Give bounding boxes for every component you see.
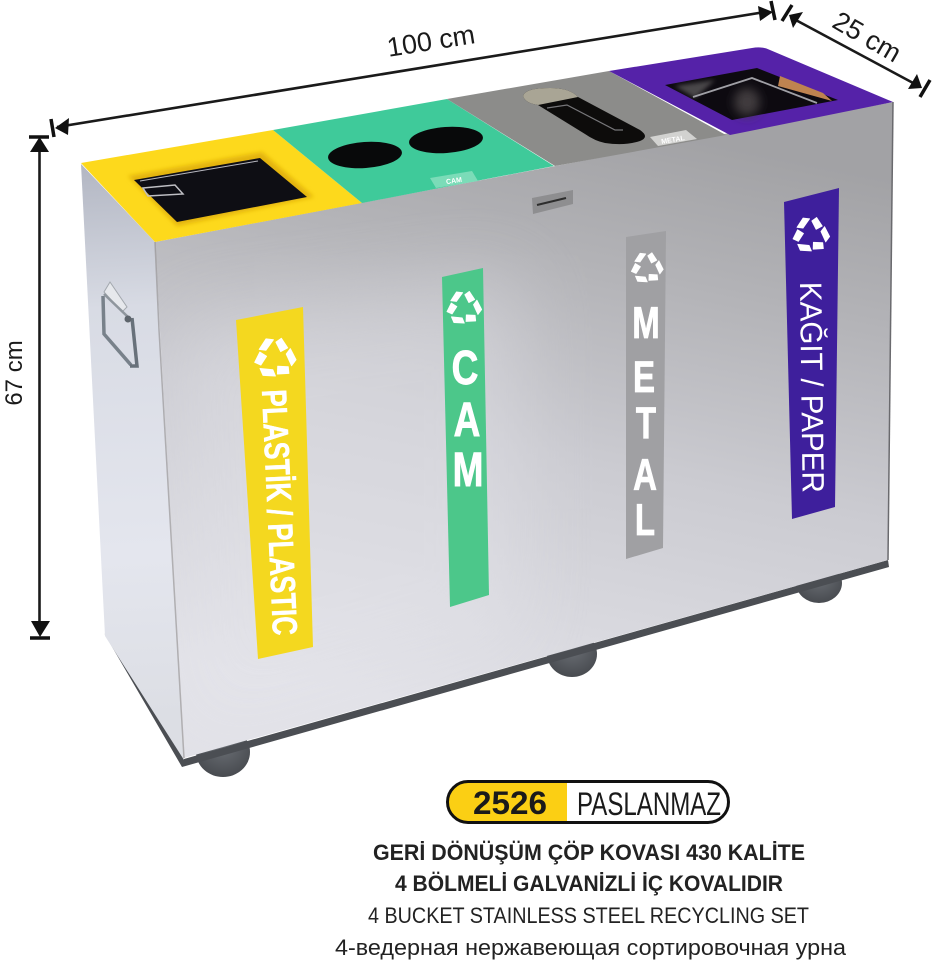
description: Russian line: 4-ведерная нержавеющая сортировочная урна bbox=[335, 935, 847, 960]
label text: KAGIT / PAPER: KAĞIT / PAPER bbox=[793, 282, 831, 493]
base plate bbox=[104, 560, 889, 767]
icon: recycling symbol bbox=[251, 338, 300, 382]
lid: glass, green bbox=[273, 99, 554, 203]
dimension: height 67 cm: 67 cm bbox=[1, 340, 28, 406]
description bbox=[335, 840, 847, 960]
label: PLASTIK / PLASTIC, yellow bbox=[236, 307, 313, 659]
label text: PLASTIK / PLASTIC: PLASTİK / PLASTIC bbox=[254, 389, 304, 636]
opening: metal slot bbox=[523, 88, 645, 144]
icon: recycling symbol bbox=[444, 291, 485, 328]
label text: METAL: T bbox=[636, 399, 656, 448]
material: PASLANMAZ bbox=[577, 786, 721, 822]
foot: right bbox=[796, 563, 842, 603]
model number: 2526 bbox=[473, 785, 547, 821]
dimension: depth 25 cm: 25 cm bbox=[828, 6, 906, 68]
lid: plastic, yellow bbox=[81, 130, 362, 242]
label text: CAM: A bbox=[454, 393, 480, 447]
label: KAGIT / PAPER, purple bbox=[784, 188, 839, 519]
right edge bbox=[888, 102, 893, 560]
opening: plastic bbox=[134, 158, 307, 222]
side handle bbox=[103, 282, 137, 366]
label: METAL, gray bbox=[626, 231, 666, 559]
foot: middle bbox=[547, 631, 597, 677]
label text: METAL: L bbox=[635, 496, 655, 545]
recycling bin bbox=[81, 47, 893, 777]
label text: CAM: M bbox=[453, 443, 483, 497]
maker plate bbox=[532, 190, 573, 214]
lid: paper, purple bbox=[609, 47, 893, 135]
description: Turkish line 2: 4 BÖLMELİ GALVANİZLİ İÇ KOVALIDIR bbox=[395, 871, 783, 896]
description: English line: 4 BUCKET STAINLESS STEEL RECYCLING SET bbox=[368, 903, 809, 928]
label: CAM, green bbox=[442, 268, 489, 607]
label text: METAL bbox=[632, 299, 660, 545]
opening: glass right bbox=[408, 124, 484, 156]
lid tag: CAM: CAM bbox=[446, 177, 463, 186]
dimension: depth 25 cm bbox=[782, 5, 930, 97]
side panel bbox=[81, 164, 184, 760]
foot: front bbox=[196, 727, 250, 777]
product badge bbox=[447, 782, 728, 822]
opening: glass left bbox=[327, 139, 403, 171]
dimension: width 100 cm bbox=[51, 1, 775, 137]
label text: CAM bbox=[452, 341, 483, 497]
icon: recycling symbol bbox=[629, 253, 666, 286]
opening: paper bbox=[665, 68, 838, 120]
icon: recycling symbol bbox=[790, 217, 833, 256]
dimension: width 100 cm: 100 cm bbox=[385, 19, 477, 63]
label text: METAL: E bbox=[633, 353, 655, 402]
corner edge bbox=[155, 242, 184, 758]
front panel sheen bbox=[197, 275, 520, 516]
lid tag: CAM bbox=[430, 171, 478, 188]
lid: metal, gray bbox=[447, 71, 726, 166]
label text: METAL: A bbox=[633, 451, 657, 500]
front panel bbox=[155, 102, 893, 758]
lid tag: METAL bbox=[650, 130, 697, 146]
label text: METAL: M bbox=[632, 299, 660, 348]
label text: CAM: C bbox=[452, 341, 478, 395]
dimension: height 67 cm bbox=[1, 137, 50, 638]
description: Turkish line 1: GERİ DÖNÜŞÜM ÇÖP KOVASI 430 KALİTE bbox=[373, 840, 805, 865]
lid tag: METAL: METAL bbox=[661, 135, 686, 146]
